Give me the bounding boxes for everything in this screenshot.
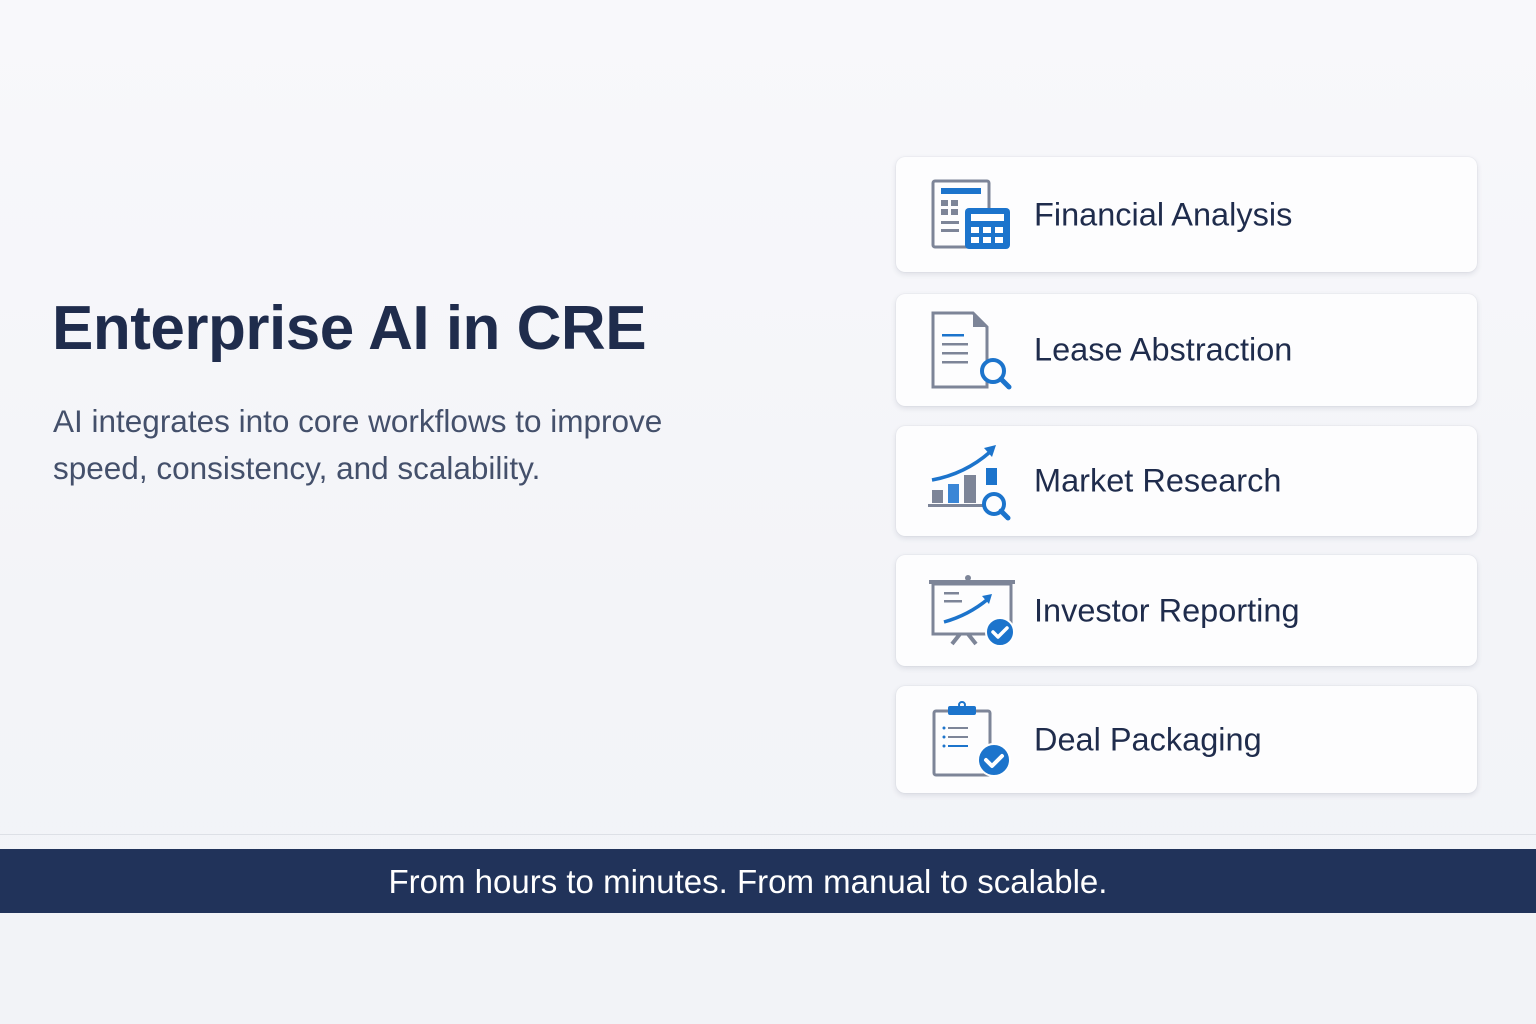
icon: document search bbox=[932, 312, 1012, 390]
subtitle bbox=[53, 403, 662, 486]
card: financial analysis bbox=[896, 157, 1477, 272]
card: market research: Market Research bbox=[1034, 462, 1281, 498]
icon: clipboard check bbox=[932, 701, 1009, 776]
banner: From hours to minutes. From manual to scalable. bbox=[389, 863, 1107, 900]
icon: presentation check bbox=[929, 575, 1015, 646]
card: investor reporting bbox=[896, 555, 1477, 666]
card: deal packaging bbox=[896, 686, 1477, 793]
card: lease abstraction bbox=[896, 294, 1477, 406]
card: market research bbox=[896, 426, 1477, 536]
banner bbox=[0, 849, 1536, 913]
card: deal packaging: Deal Packaging bbox=[1034, 721, 1262, 757]
icon: calculator bbox=[932, 180, 1010, 249]
subtitle: AI integrates into core workflows to improve bbox=[53, 403, 662, 439]
subtitle: speed, consistency, and scalability. bbox=[53, 450, 540, 486]
card: financial analysis: Financial Analysis bbox=[1034, 196, 1292, 232]
card: investor reporting: Investor Reporting bbox=[1034, 592, 1300, 628]
card: lease abstraction: Lease Abstraction bbox=[1034, 332, 1292, 368]
title: Enterprise AI in CRE bbox=[52, 294, 646, 363]
icon: chart search bbox=[928, 445, 1010, 520]
